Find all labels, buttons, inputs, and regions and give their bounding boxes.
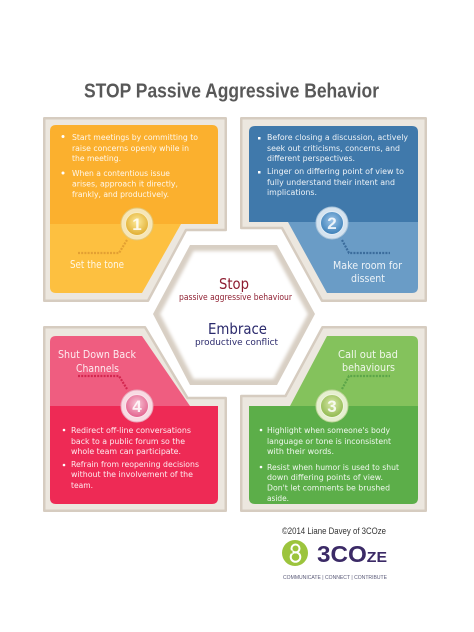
logo wordmark: 3COZE — [317, 541, 387, 567]
panel 4 bullet text: whole team can participate. — [71, 447, 181, 456]
infographic — [44, 80, 426, 581]
panel 3 bullet text: down differing points of view. — [267, 473, 383, 482]
stop subheading: passive aggressive behaviour — [179, 293, 292, 303]
panel 4 bullet text: team. — [71, 481, 93, 490]
panel: set the tone — [44, 118, 226, 301]
panel 2 dotted connector — [342, 240, 390, 253]
panel 2 bullet text — [258, 133, 408, 197]
panel: shut down back channels — [44, 327, 226, 511]
panel: make room for dissent — [241, 118, 426, 301]
title: STOP Passive Aggressive Behavior — [84, 80, 379, 102]
panel 4 label — [58, 349, 137, 375]
panel: call out bad behaviours — [241, 327, 426, 511]
panel 4 bullet text: Redirect off-line conversations — [71, 426, 191, 435]
panel 1 bullet text: frankly, and productively. — [72, 190, 169, 199]
panel 1 bullet text: the meeting. — [72, 154, 121, 163]
panel 3 number badge: 3 — [327, 397, 337, 416]
panel 4 bullet text: without the involvement of the — [71, 470, 193, 479]
panel 1 number badge: 1 — [132, 215, 142, 234]
embrace subheading: productive conflict — [195, 338, 279, 348]
panel 1 label: Set the tone — [70, 259, 124, 271]
panel 1 number badge — [121, 208, 153, 240]
panel 1 bullet text: raise concerns openly while in — [72, 144, 189, 153]
panel 3 number badge — [316, 390, 348, 422]
copyright: ©2014 Liane Davey of 3COze — [282, 526, 386, 536]
panel 4 label: Channels — [76, 363, 119, 375]
panel 4 bullet text — [63, 426, 199, 490]
panel 3 bullet text: Resist when humor is used to shut — [267, 463, 399, 472]
panel 3 bullet text: Don't let comments be brushed — [267, 484, 390, 492]
panel 2 bullet text: Linger on differing point of view to — [267, 167, 404, 176]
logo tagline: COMMUNICATE | CONNECT | CONTRIBUTE — [283, 575, 387, 581]
panel 3 bullet text: language or tone is inconsistent — [267, 437, 391, 446]
panel 1 bullet text — [62, 133, 198, 199]
panel 1 bullet text: Start meetings by committing to — [72, 133, 198, 142]
panel 2 label: dissent — [351, 273, 385, 285]
logo: 3COze — [282, 540, 387, 581]
panel 3 bullet text — [260, 426, 399, 503]
panel 4 dotted connector — [78, 376, 127, 389]
center hexagon — [153, 245, 315, 385]
panel 2 number badge — [316, 207, 348, 239]
panel 2 bullet text: Before closing a discussion, actively — [267, 133, 408, 142]
panel 3 dotted connector — [342, 376, 390, 389]
panel 4 bullet text: Refrain from reopening decisions — [71, 460, 199, 469]
panel 2 bullet text: different perspectives. — [267, 154, 355, 163]
panel 2 bullet text: seek out criticisms, concerns, and — [267, 144, 400, 153]
logo icon — [282, 540, 308, 566]
stop heading: Stop — [219, 275, 249, 293]
panel 2 label — [333, 260, 403, 285]
panel 1 dotted connector — [78, 240, 127, 253]
panel 3 label: behaviours — [342, 362, 395, 374]
panel 1 bullet text: arises, approach it directly, — [72, 180, 178, 188]
panel 2 label: Make room for — [333, 260, 403, 272]
panel 3 bullet text: Highlight when someone's body — [267, 426, 390, 435]
panel 2 bullet text: implications. — [267, 188, 317, 197]
embrace heading: Embrace — [208, 320, 267, 338]
panel 3 label: Call out bad — [338, 349, 398, 361]
panel 4 label: Shut Down Back — [58, 349, 137, 361]
panel 2 number badge: 2 — [327, 214, 337, 233]
panel 3 label — [338, 349, 398, 374]
panel 2 bullet text: fully understand their intent and — [267, 178, 395, 187]
panel 1 bullet text: When a contentious issue — [72, 169, 170, 178]
panel 4 number badge: 4 — [132, 397, 142, 416]
panel 3 bullet text: with their words. — [267, 447, 334, 456]
panel 4 bullet text: back to a public forum so the — [71, 437, 185, 446]
panel 4 number badge — [121, 390, 153, 422]
panel 3 bullet text: aside. — [267, 494, 289, 503]
